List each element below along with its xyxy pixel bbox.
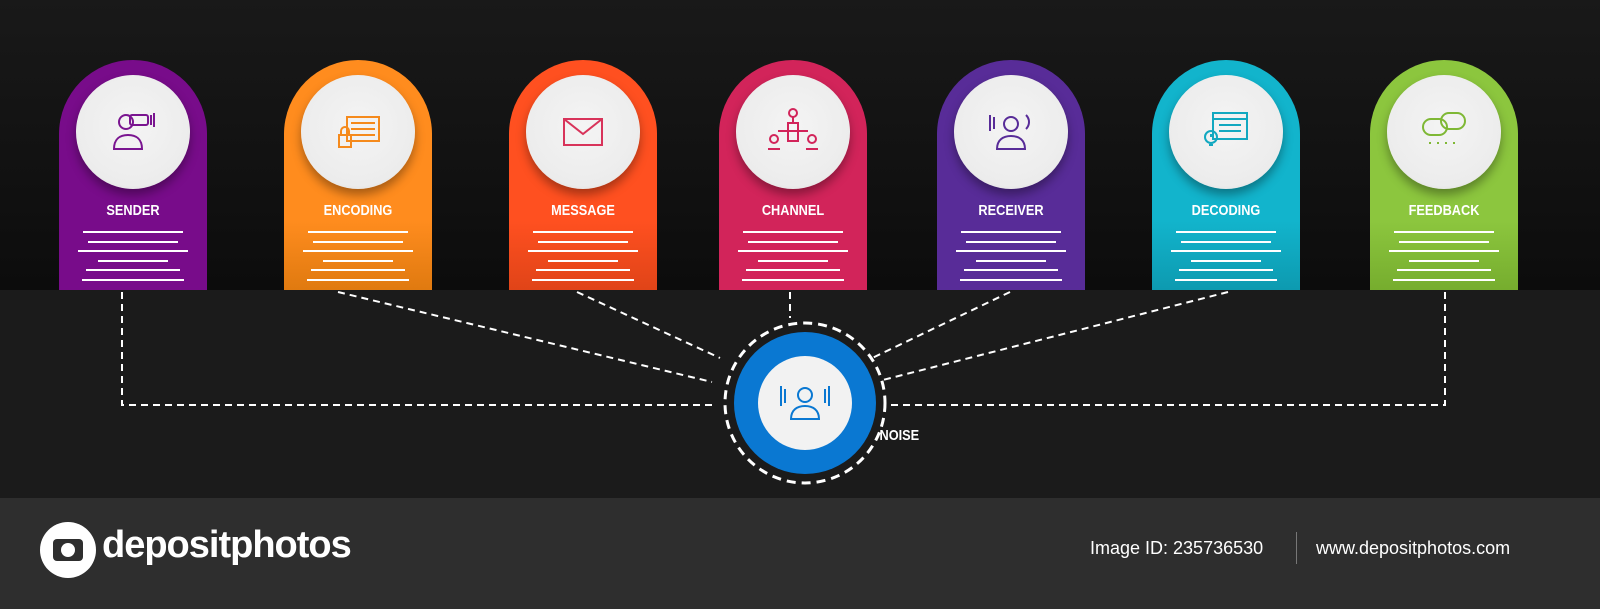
card: channel (719, 60, 867, 290)
card: encoding: ENCODING (324, 202, 392, 219)
card: feedback (1370, 60, 1518, 290)
logo (40, 522, 96, 578)
footer band: depositphotos (102, 524, 351, 566)
card: message: MESSAGE (551, 202, 615, 219)
footer band: www.depositphotos.com (1316, 538, 1510, 558)
top background (0, 0, 1600, 290)
card: receiver (937, 60, 1085, 290)
card: sender: SENDER (106, 202, 160, 219)
card: decoding (1152, 60, 1300, 290)
footer band (0, 498, 1600, 609)
noise node (724, 322, 886, 484)
image id: Image ID: 235736530 (1090, 538, 1263, 558)
card: channel: CHANNEL (762, 202, 824, 219)
card: sender (59, 60, 207, 290)
card: encoding (284, 60, 432, 290)
card: decoding: DECODING (1192, 202, 1260, 219)
card: receiver: RECEIVER (978, 202, 1044, 219)
card: feedback: FEEDBACK (1409, 202, 1479, 219)
card: message (509, 60, 657, 290)
noise label: NOISE (880, 427, 919, 444)
